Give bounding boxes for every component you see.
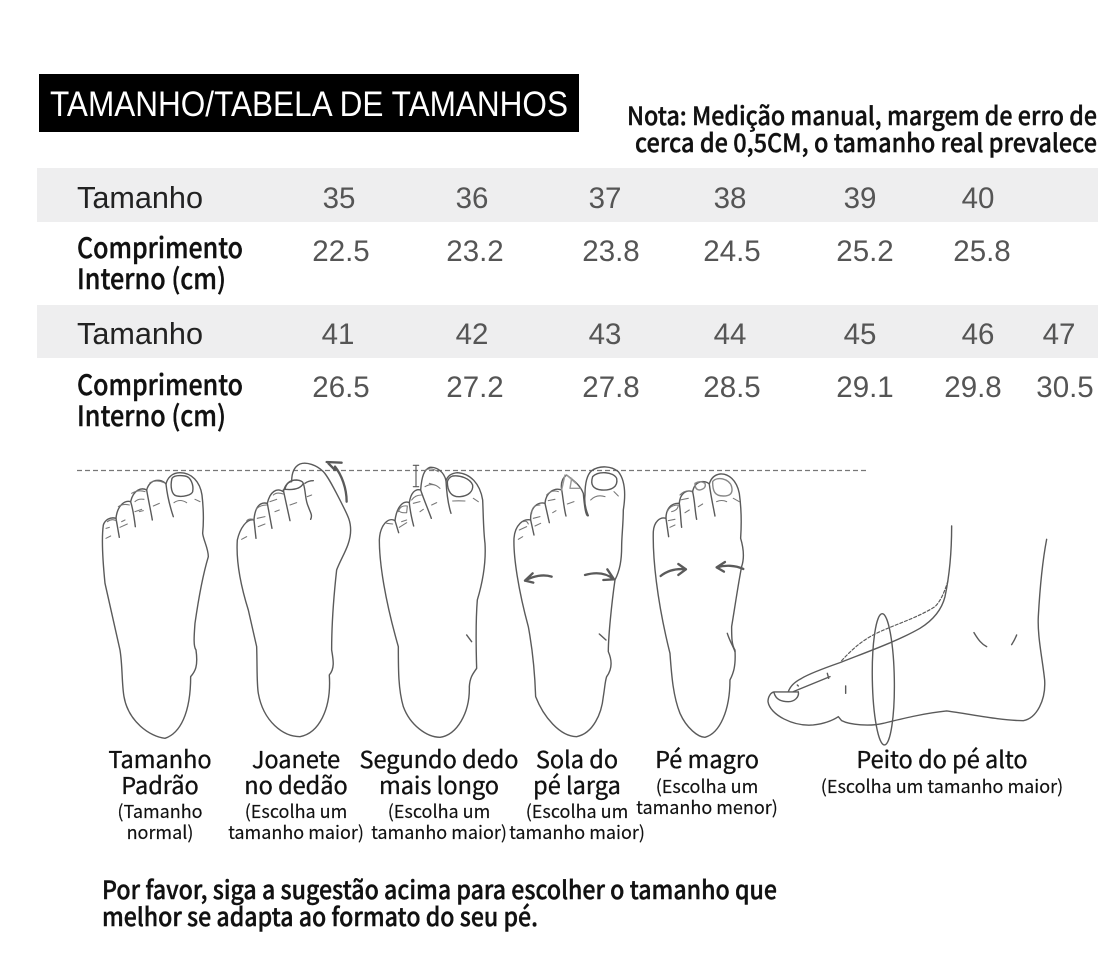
- closing advice: [102, 871, 777, 934]
- size table: sizes 35 to 40: 37: [589, 182, 621, 215]
- size table: sizes 35 to 40: 23.2: [446, 235, 504, 268]
- size table: sizes 41 to 47: 27.8: [582, 371, 640, 404]
- size table: sizes 41 to 47: Interno (cm): [77, 395, 226, 435]
- size table: sizes 35 to 40: Tamanho: [77, 180, 203, 215]
- label: bunion: tamanho maior): [228, 819, 364, 845]
- label: bunion: Joanete: [252, 741, 340, 775]
- label: high instep: [821, 741, 1063, 799]
- size table: sizes 41 to 47: 47: [1043, 318, 1075, 351]
- size table: sizes 35 to 40: 36: [456, 182, 488, 215]
- label: standard size: Tamanho: [108, 741, 212, 775]
- size table: sizes 35 to 40: 25.8: [953, 235, 1011, 268]
- label: long second toe: [359, 741, 519, 845]
- size table: sizes 35 to 40: 23.8: [582, 235, 640, 268]
- size table: sizes 41 to 47: 29.1: [836, 371, 894, 404]
- measurement note: Nota: Medição manual, margem de erro de: [627, 97, 1097, 133]
- size table: sizes 41 to 47: 44: [714, 318, 746, 351]
- title banner: TAMANHO/TABELA DE TAMANHOS: [50, 85, 568, 124]
- size table: sizes 41 to 47: 28.5: [703, 371, 761, 404]
- label: wide sole: pé larga: [533, 767, 621, 801]
- label: long second toe: (Escolha um: [388, 798, 490, 824]
- label: standard size: (Tamanho: [117, 798, 203, 824]
- label: wide sole: tamanho maior): [509, 819, 645, 845]
- icon: bunion foot: [237, 462, 351, 737]
- label: narrow foot: Pé magro: [655, 741, 759, 775]
- label: bunion: [228, 741, 364, 845]
- size table: sizes 41 to 47: 41: [322, 318, 354, 351]
- label: wide sole: [509, 741, 645, 845]
- label: long second toe: mais longo: [379, 767, 499, 801]
- icon: high instep foot side view: [768, 526, 1047, 745]
- size table: sizes 35 to 40: [37, 168, 1098, 298]
- size table: sizes 41 to 47: [37, 305, 1098, 435]
- label: bunion: no dedão: [244, 767, 348, 801]
- icon: narrow foot: [653, 474, 743, 737]
- label: long second toe: tamanho maior): [371, 819, 507, 845]
- size table: sizes 35 to 40: 24.5: [703, 235, 761, 268]
- label: narrow foot: (Escolha um: [656, 773, 758, 799]
- size table: sizes 35 to 40: 40: [962, 182, 994, 215]
- label: long second toe: Segundo dedo: [359, 741, 519, 775]
- label: narrow foot: tamanho menor): [636, 794, 778, 820]
- icon: wide sole foot: [514, 467, 625, 737]
- size table: sizes 35 to 40: 22.5: [312, 235, 370, 268]
- size table: sizes 35 to 40: Comprimento: [77, 227, 243, 267]
- size table: sizes 41 to 47: 29.8: [944, 371, 1002, 404]
- size table: sizes 35 to 40: 25.2: [836, 235, 894, 268]
- size table: sizes 41 to 47: 43: [589, 318, 621, 351]
- closing advice: melhor se adapta ao formato do seu pé.: [102, 898, 538, 934]
- label: wide sole: (Escolha um: [526, 798, 628, 824]
- size table: sizes 35 to 40: Interno (cm): [77, 258, 226, 298]
- size table: sizes 35 to 40: 35: [323, 182, 355, 215]
- size table: sizes 41 to 47: 42: [456, 318, 488, 351]
- size table: sizes 41 to 47: 30.5: [1036, 371, 1094, 404]
- size table: sizes 35 to 40: 39: [844, 182, 876, 215]
- label: standard size: [108, 741, 212, 845]
- closing advice: Por favor, siga a sugestão acima para escolher o tamanho que: [102, 871, 777, 907]
- size table: sizes 41 to 47: 26.5: [312, 371, 370, 404]
- size table: sizes 41 to 47: 45: [844, 318, 876, 351]
- label: high instep: (Escolha um tamanho maior): [821, 773, 1063, 799]
- label: high instep: Peito do pé alto: [856, 741, 1028, 775]
- size table: sizes 35 to 40: 38: [714, 182, 746, 215]
- label: standard size: Padrão: [121, 767, 199, 801]
- icon: long second toe foot: [379, 465, 485, 737]
- label: narrow foot: [636, 741, 778, 820]
- label: standard size: normal): [127, 819, 193, 845]
- size table: sizes 41 to 47: Tamanho: [77, 316, 203, 351]
- size table: sizes 41 to 47: 46: [962, 318, 994, 351]
- icon: standard foot: [102, 473, 208, 738]
- measurement note: [627, 97, 1097, 160]
- size table: sizes 41 to 47: Comprimento: [77, 364, 243, 404]
- label: bunion: (Escolha um: [245, 798, 347, 824]
- measurement note: cerca de 0,5CM, o tamanho real prevalece: [635, 124, 1097, 160]
- label: wide sole: Sola do: [536, 741, 618, 775]
- title banner: [39, 74, 579, 132]
- size table: sizes 41 to 47: 27.2: [446, 371, 504, 404]
